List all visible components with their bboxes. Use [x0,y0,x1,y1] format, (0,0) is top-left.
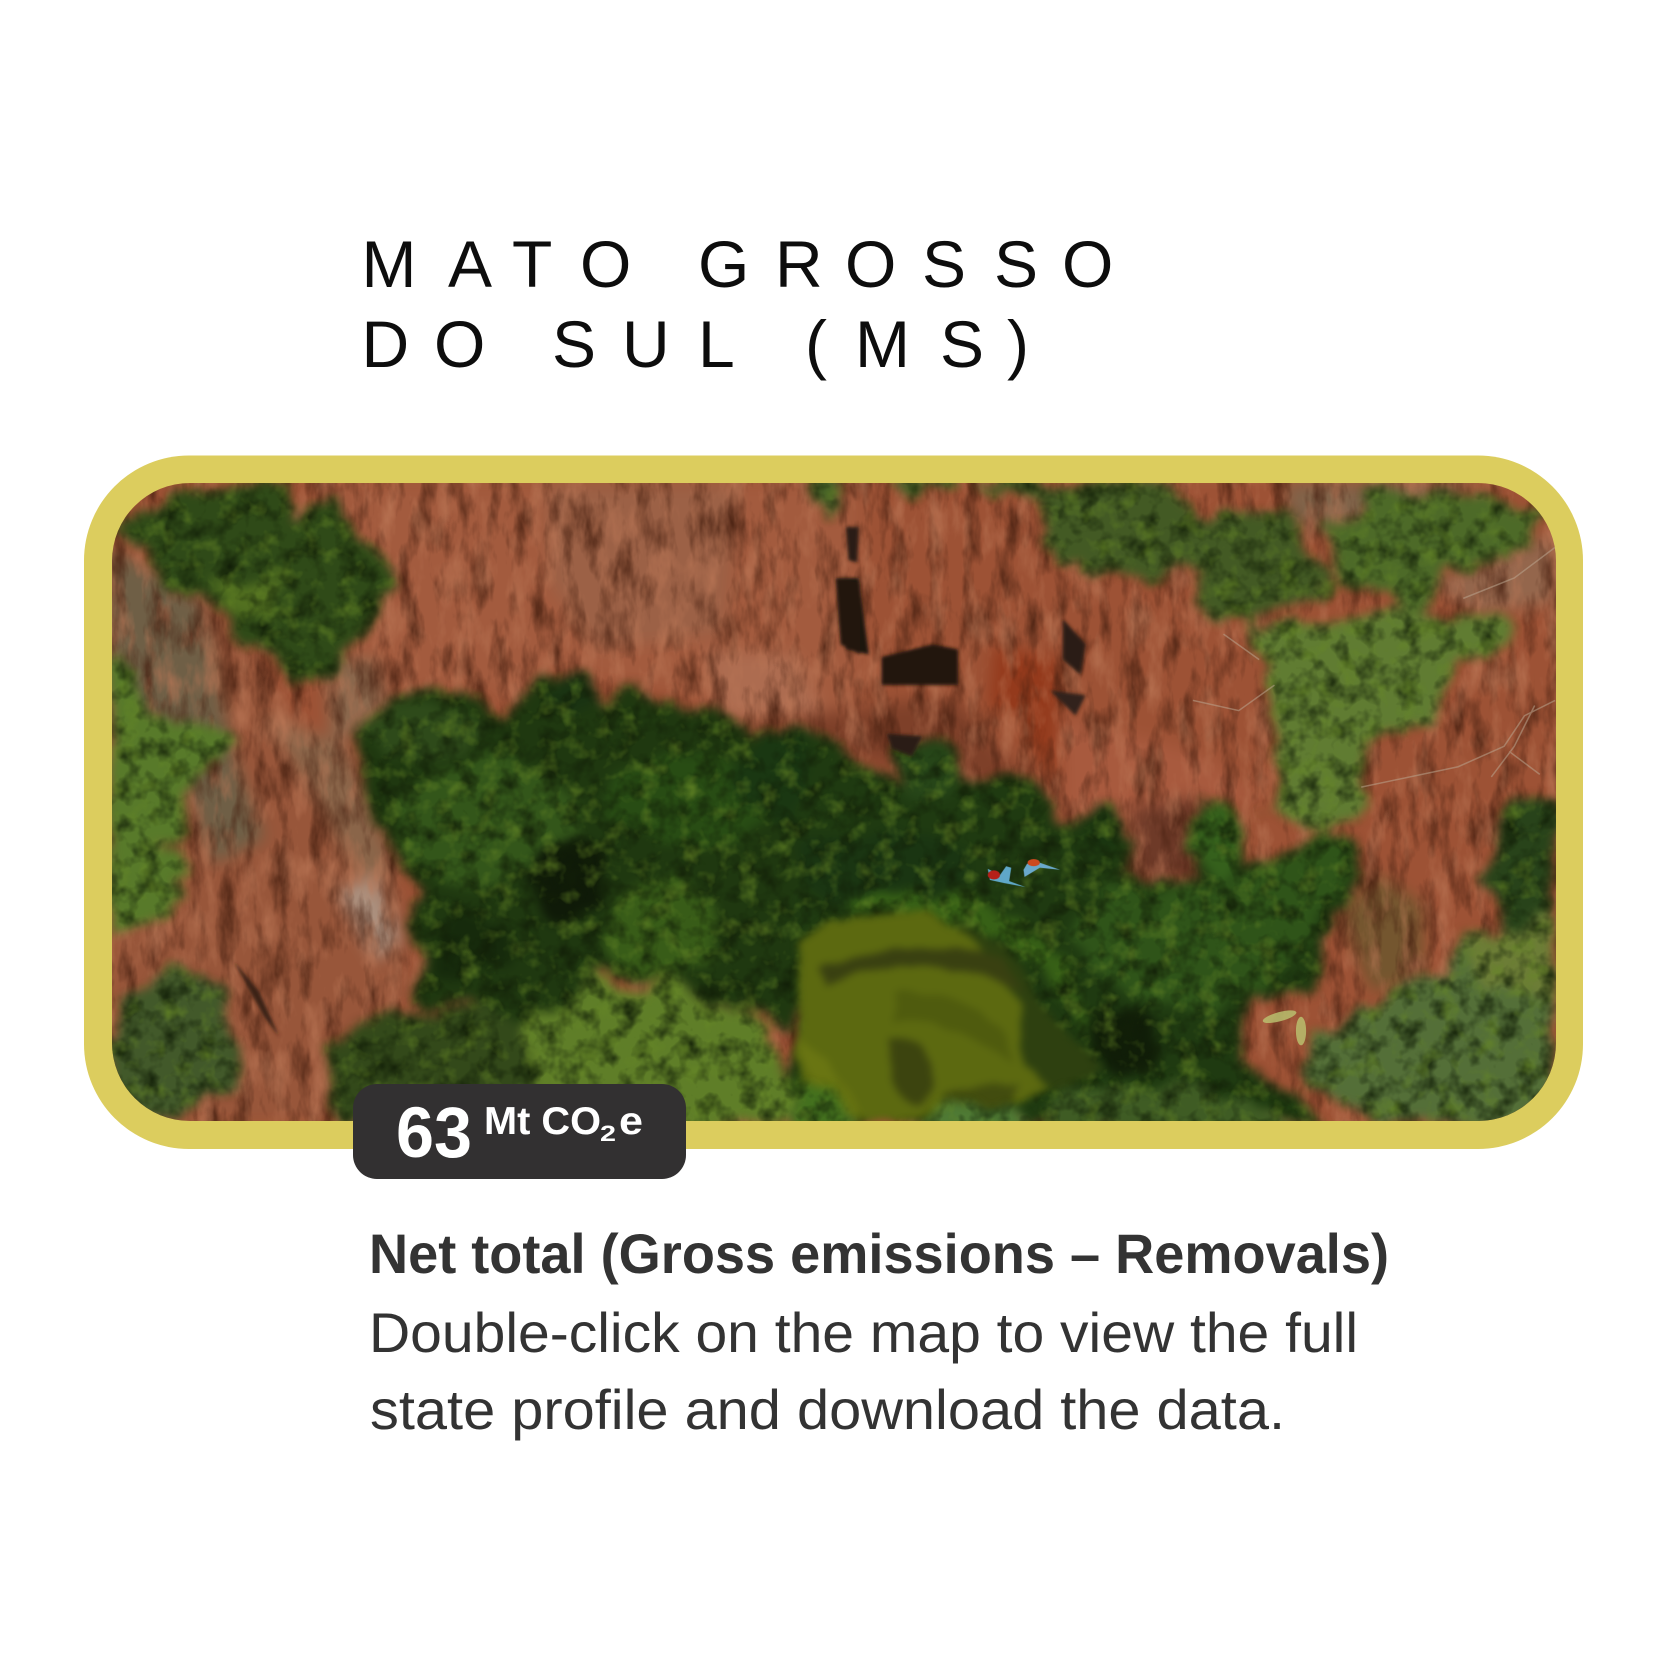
photo: sinkhole with red cliffs, forest and green pond [100,470,1570,1135]
green pond [795,912,1104,1121]
unit label [484,1100,643,1146]
foliage over the pond edge [786,1076,1290,1121]
forest and foliage layer [111,484,1556,1121]
unit label: Mt CO [484,1100,601,1143]
photo frame [84,456,1583,1149]
title [362,227,1113,381]
unit label: e [619,1100,643,1143]
description text: Double-click on the map to view the full [369,1301,1358,1364]
dark cave openings [233,527,1086,1037]
description text: state profile and download the data. [370,1378,1285,1441]
value number: 63 [396,1094,472,1173]
description text: Net total (Gross emissions – Removals) [369,1222,1389,1285]
value badge [353,1084,686,1179]
description text [369,1222,1389,1441]
title: MATO GROSSO [362,227,1113,301]
cliff rock layer [100,470,1570,1135]
macaws and branches [988,547,1555,1045]
title: DO SUL (MS) [362,307,1029,381]
unit label: 2 [600,1121,616,1146]
